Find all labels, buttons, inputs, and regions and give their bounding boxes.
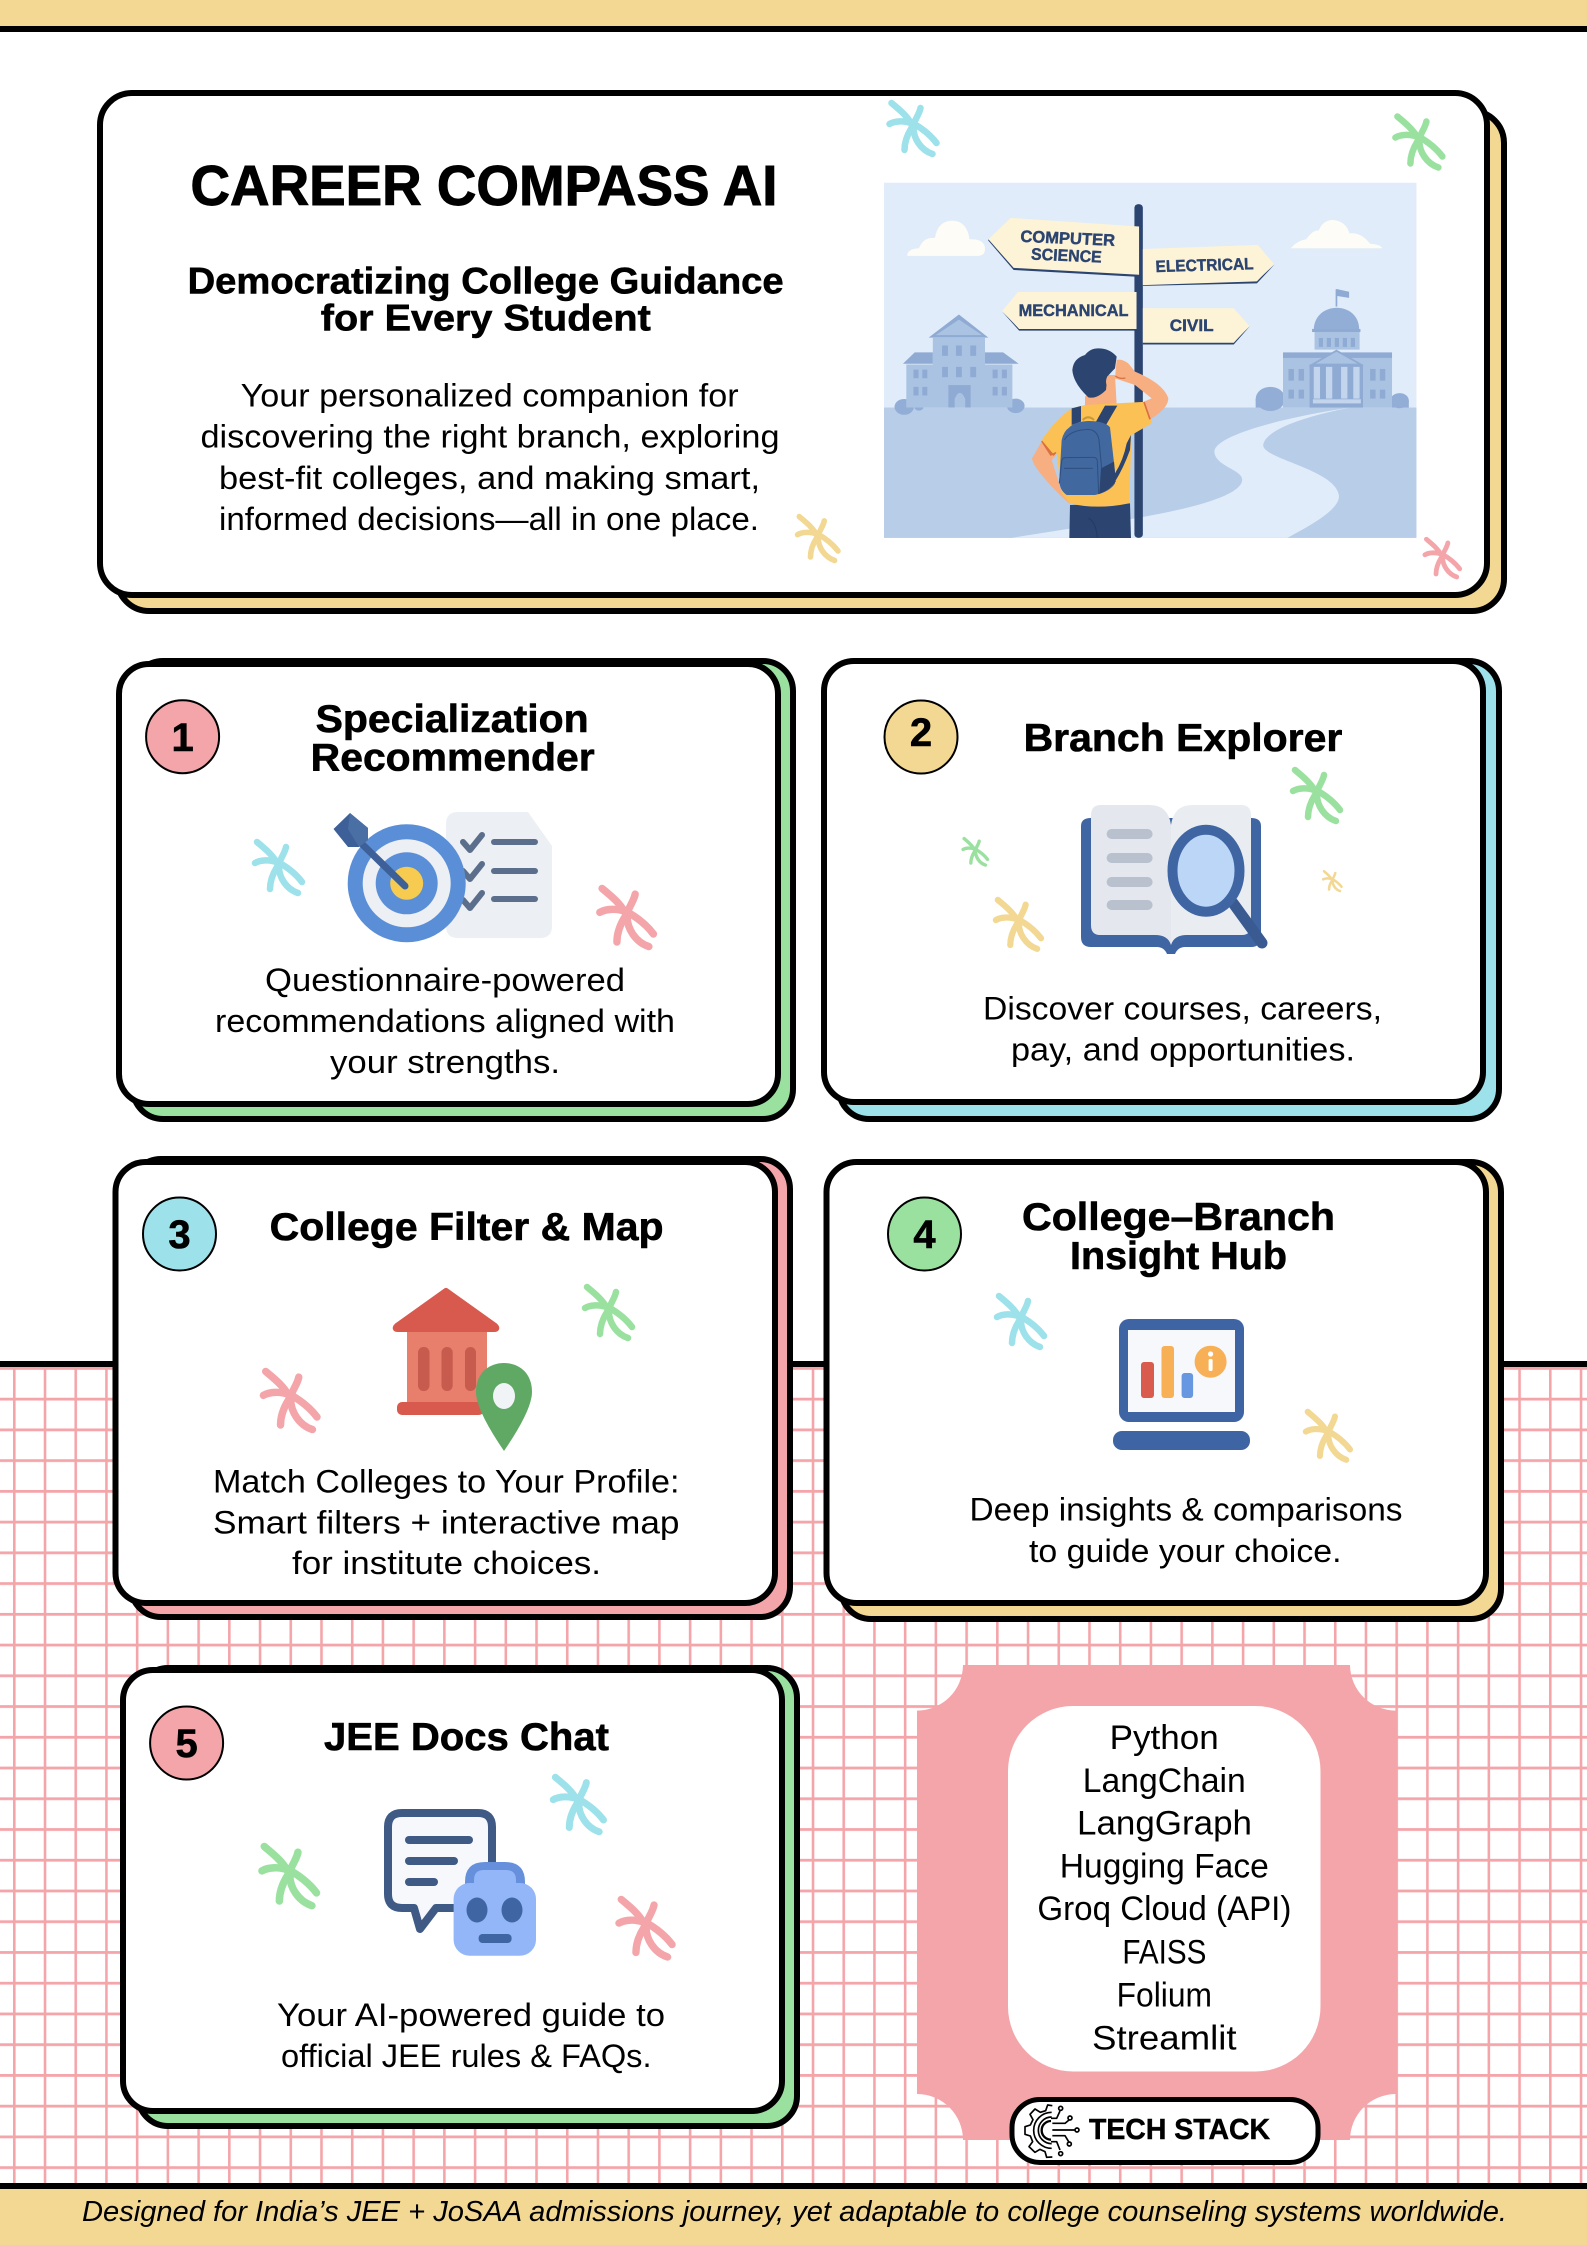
tech stack list: Python xyxy=(1110,1719,1219,1757)
hero description: Your personalized companion for xyxy=(241,378,739,414)
heading: JEE Docs Chat xyxy=(324,1716,609,1759)
tech stack list xyxy=(1037,1719,1291,2057)
icon: pink spark xyxy=(600,888,653,947)
icon: yellow spark xyxy=(798,517,838,560)
icon: green spark xyxy=(585,1287,632,1338)
description xyxy=(213,1464,680,1581)
icon: cyan spark xyxy=(890,103,936,154)
icon: cyan spark xyxy=(255,842,302,893)
description: Questionnaire-powered xyxy=(265,962,625,998)
sign: computer science xyxy=(988,218,1139,277)
icon: green spark xyxy=(1395,116,1442,168)
icon: yellow spark xyxy=(1306,1412,1350,1460)
icon: cyan spark xyxy=(997,1296,1044,1347)
hero description: best-fit colleges, and making smart, xyxy=(219,460,760,496)
grid background xyxy=(0,1361,1587,2183)
tech stack list: Groq Cloud (API) xyxy=(1037,1890,1291,1928)
number badge 3 xyxy=(143,1198,216,1270)
sign: mechanical xyxy=(1002,292,1137,331)
icon: small yellow spark xyxy=(1323,871,1342,891)
number badge 1: 1 xyxy=(171,716,194,760)
sign: electrical xyxy=(1143,245,1275,286)
sign: computer science: COMPUTER xyxy=(1020,227,1116,249)
icon: target and checklist xyxy=(334,812,552,942)
tech stack list: FAISS xyxy=(1122,1933,1206,1971)
icon: yellow spark xyxy=(996,900,1041,949)
description xyxy=(215,962,675,1080)
description: official JEE rules & FAQs. xyxy=(281,2038,652,2074)
description: Match Colleges to Your Profile: xyxy=(213,1464,680,1500)
description: Discover courses, careers, xyxy=(983,990,1382,1026)
icon: institute building and map pin xyxy=(396,1291,532,1451)
heading: College–Branch xyxy=(1022,1196,1335,1239)
icon: pink spark xyxy=(263,1371,317,1430)
tech stack label: TECH STACK xyxy=(1089,2114,1270,2146)
description: Your AI-powered guide to xyxy=(277,1997,665,2033)
icon: small green spark xyxy=(963,839,988,865)
description: to guide your choice. xyxy=(1029,1533,1342,1569)
description xyxy=(970,1491,1402,1569)
heading xyxy=(1022,1196,1335,1278)
icon: pink spark xyxy=(1425,539,1460,577)
number badge 2: 2 xyxy=(910,711,932,755)
number badge 4 xyxy=(888,1198,961,1270)
hero description xyxy=(200,378,780,537)
description: pay, and opportunities. xyxy=(1011,1031,1355,1067)
panel: card 1 specialization recommender xyxy=(119,661,793,1119)
heading: Insight Hub xyxy=(1070,1235,1287,1278)
description: recommendations aligned with xyxy=(215,1003,675,1039)
student figure xyxy=(1032,348,1168,538)
sign: computer science: SCIENCE xyxy=(1031,244,1102,266)
description xyxy=(983,990,1382,1067)
heading: Recommender xyxy=(311,737,595,780)
icon: open book with magnifier xyxy=(1081,805,1262,954)
illustration scenery xyxy=(884,183,1416,538)
tech stack list: LangGraph xyxy=(1077,1804,1252,1842)
tech stack list: Hugging Face xyxy=(1060,1847,1269,1885)
description: your strengths. xyxy=(330,1044,560,1080)
number badge 3: 3 xyxy=(168,1213,191,1257)
tech stack label pill xyxy=(1012,2100,1318,2162)
tech stack list: Folium xyxy=(1117,1976,1212,2014)
number badge 5 xyxy=(150,1706,223,1780)
heading: Specialization xyxy=(316,698,589,741)
heading: Branch Explorer xyxy=(1024,717,1342,760)
sign: mechanical: MECHANICAL xyxy=(1019,301,1129,320)
sign: civil xyxy=(1143,308,1250,344)
number badge 4: 4 xyxy=(913,1213,936,1257)
illustration: student at crossroads signpost xyxy=(884,183,1416,538)
tech stack list: LangChain xyxy=(1083,1762,1246,1800)
top band xyxy=(0,0,1587,32)
heading xyxy=(311,698,595,780)
panel: card 5 JEE docs chat xyxy=(123,1668,797,2126)
footer note: Designed for India’s JEE + JoSAA admissions journey, yet adaptable to college counseling systems worldwide. xyxy=(82,2196,1507,2228)
number badge 5: 5 xyxy=(175,1722,198,1766)
number badge 2 xyxy=(884,700,958,774)
panel: card 2 branch explorer xyxy=(824,661,1499,1119)
subtitle: Democratizing College Guidance xyxy=(188,260,784,302)
number badge 1 xyxy=(146,700,219,773)
icon: chat bubble and robot xyxy=(388,1813,536,1956)
icon: gear circuit xyxy=(1025,2105,1079,2157)
icon: laptop with chart xyxy=(1113,1319,1250,1450)
title: CAREER COMPASS AI xyxy=(190,154,778,218)
sign: civil: CIVIL xyxy=(1170,316,1214,335)
icon: pink spark xyxy=(619,1899,672,1957)
hero description: informed decisions—all in one place. xyxy=(219,501,759,537)
icon: cyan spark xyxy=(553,1777,604,1832)
footer band xyxy=(0,2183,1587,2245)
icon: green spark xyxy=(262,1846,316,1906)
description xyxy=(277,1997,665,2074)
heading: College Filter & Map xyxy=(270,1206,664,1249)
panel: hero xyxy=(100,93,1504,611)
description: Smart filters + interactive map xyxy=(213,1504,680,1540)
sign: electrical: ELECTRICAL xyxy=(1155,254,1254,276)
tech stack list: Streamlit xyxy=(1092,2019,1237,2057)
hero description: discovering the right branch, exploring xyxy=(200,418,780,454)
icon: green spark xyxy=(1293,770,1340,821)
panel: card 4 college-branch insight hub xyxy=(826,1162,1501,1619)
subtitle: for Every Student xyxy=(321,298,651,338)
panel: tech stack xyxy=(917,1665,1396,2162)
panel: card 3 college filter and map xyxy=(116,1159,790,1617)
description: Deep insights & comparisons xyxy=(970,1491,1402,1527)
description: for institute choices. xyxy=(292,1545,601,1581)
subtitle xyxy=(188,260,784,338)
